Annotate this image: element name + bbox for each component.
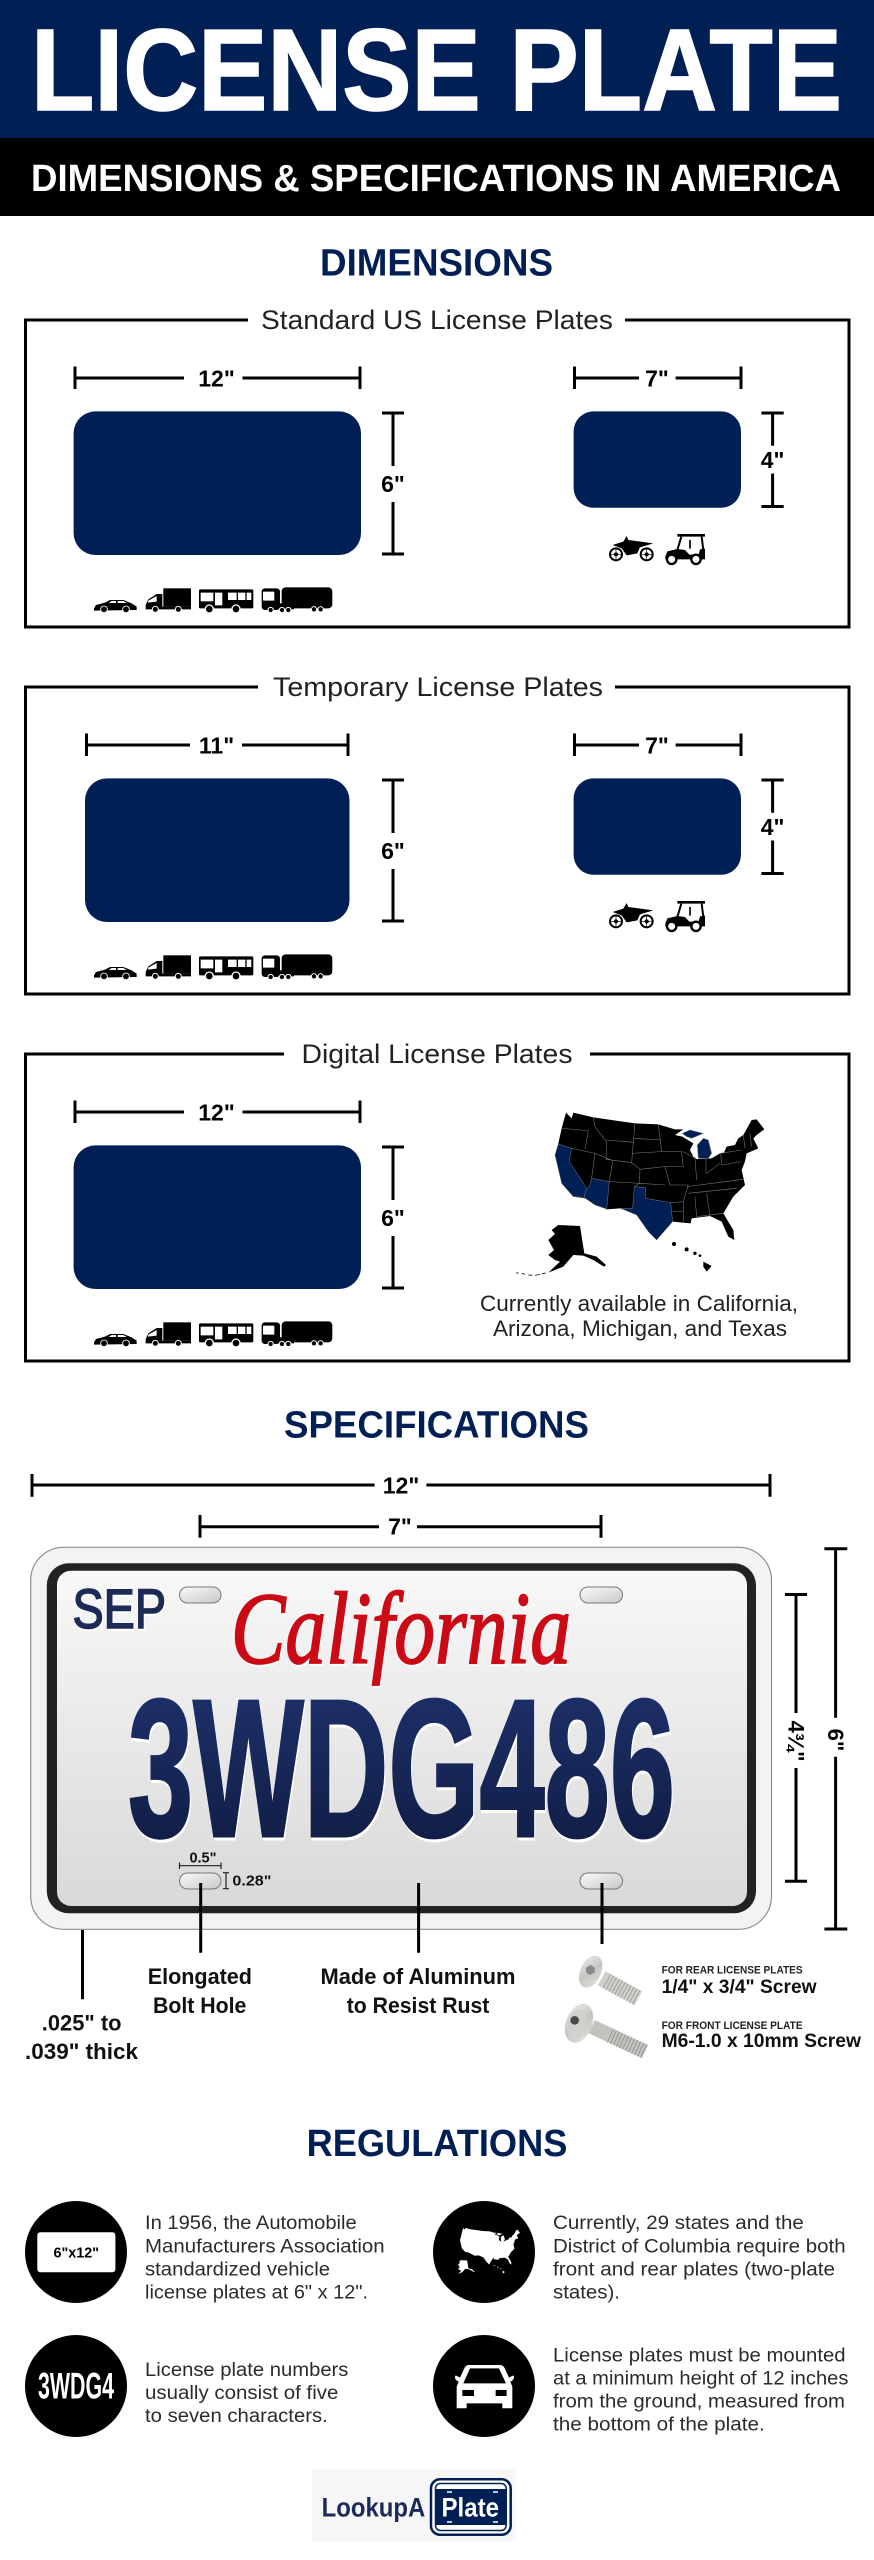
heading: specifications: SPECIFICATIONS [284, 1404, 589, 1446]
plate month SEP: SEP [72, 1577, 166, 1640]
text [553, 2346, 848, 2436]
label: elongated bolt hole: Elongated [148, 1964, 252, 1989]
plate 12x6 [74, 1100, 405, 1289]
text: usually consist of five [145, 2383, 338, 2404]
plate 11x6 [85, 732, 405, 922]
panel: standard US license plates [26, 305, 849, 627]
text: the bottom of the plate. [553, 2415, 765, 2436]
text: Currently, 29 states and the [553, 2213, 804, 2234]
text: front and rear plates (two-plate [553, 2259, 835, 2280]
icons: motorcycle and golf cart [610, 534, 705, 564]
icons: car truck bus semi [94, 954, 332, 980]
label: elongated bolt hole: Bolt Hole [153, 1993, 246, 2018]
illustration: California license plate [31, 1547, 771, 1929]
text [553, 2213, 846, 2303]
dimension: overall width 12 inches [32, 1472, 770, 1498]
text: from the ground, measured from [553, 2392, 845, 2413]
text: at a minimum height of 12 inches [553, 2369, 848, 2390]
subtitle bar [0, 138, 874, 216]
plate state name: California [231, 1572, 571, 1686]
plate 12x6 [74, 366, 405, 555]
regulation: mounting height [433, 2335, 848, 2437]
plate 12x6: 12" [198, 366, 235, 392]
text [145, 2360, 348, 2427]
label: thickness: .025" to [42, 2011, 121, 2036]
plate 12x6: 6" [381, 471, 405, 497]
regulation: 1956 standard [25, 2201, 385, 2303]
text: License plate numbers [145, 2360, 348, 2381]
plate 11x6: 6" [381, 838, 405, 864]
bolt hole height [223, 1873, 271, 1890]
text: rear plate screw [662, 1964, 817, 1998]
plate 7x4: 4" [761, 447, 784, 473]
icon: car front [433, 2335, 535, 2437]
plate 12x6: 6" [381, 1205, 405, 1231]
heading: regulations: REGULATIONS [307, 2123, 567, 2165]
icon: front plate screw [560, 2000, 645, 2052]
icon: 6x12 plate [25, 2201, 127, 2303]
text: front plate screw [662, 2020, 861, 2052]
bolt hole width: 0.5" [189, 1851, 217, 1867]
map: US with digital plate states highlighted [516, 1113, 764, 1275]
regulation: two-plate states [433, 2201, 846, 2303]
plate 7x4 [574, 366, 784, 508]
map caption: Arizona, Michigan, and Texas [493, 1316, 787, 1341]
regulation: plate characters [25, 2335, 348, 2437]
text: In 1956, the Automobile [145, 2213, 357, 2234]
plate 12x6: 12" [198, 1100, 235, 1126]
map caption [480, 1291, 798, 1341]
label: thickness [25, 2011, 139, 2064]
logo: LookupAPlate: Plate [442, 2493, 499, 2523]
icon: 3WDG4: 3WDG4 [38, 2365, 114, 2406]
label: aluminum: to Resist Rust [347, 1993, 490, 2018]
plate 7x4: 7" [645, 366, 669, 392]
text: rear plate screw: 1/4" x 3/4" Screw [662, 1977, 817, 1998]
map caption: Currently available in California, [480, 1291, 798, 1316]
icons: car truck bus semi [94, 587, 332, 613]
dimension: overall width 12 inches: 12" [383, 1472, 419, 1498]
subtitle bar: DIMENSIONS & SPECIFICATIONS IN AMERICA [31, 158, 841, 200]
text: front plate screw: FOR FRONT LICENSE PLATE [662, 2020, 803, 2032]
label: elongated bolt hole [148, 1964, 252, 2018]
panel title: Digital License Plates [302, 1039, 572, 1069]
text: front plate screw: M6-1.0 x 10mm Screw [662, 2031, 861, 2052]
text: Manufacturers Association [145, 2236, 385, 2257]
dimension: bolt spacing 7 inches: 7" [388, 1514, 412, 1540]
icons: motorcycle and golf cart [610, 901, 705, 931]
plate 7x4: 4" [761, 814, 784, 840]
label: thickness: .039" thick [25, 2039, 139, 2064]
text: to seven characters. [145, 2406, 328, 2427]
dimension: overall height 6 inches [823, 1549, 848, 1929]
plate 7x4: 7" [645, 732, 669, 758]
header banner [0, 0, 874, 138]
dimension: bolt spacing 4 3/4 inches: 4¾" [784, 1720, 808, 1762]
leader lines [82, 1883, 602, 1999]
text: District of Columbia require both [553, 2236, 846, 2257]
panel title: Standard US License Plates [261, 305, 613, 335]
text: License plates must be mounted [553, 2346, 846, 2367]
bolt hole height: 0.28" [232, 1874, 271, 1890]
label: aluminum: Made of Aluminum [320, 1964, 516, 1989]
icons: car truck bus semi [94, 1321, 332, 1347]
text [145, 2213, 385, 2303]
dimension: bolt spacing 4 3/4 inches [784, 1594, 808, 1881]
plate 7x4 [574, 732, 784, 875]
panel title: Temporary License Plates [273, 672, 603, 702]
bolt hole width [180, 1851, 221, 1869]
logo: LookupAPlate [312, 2469, 516, 2541]
icon: US map [433, 2201, 535, 2303]
panel: temporary license plates [26, 672, 849, 994]
text: license plates at 6" x 12". [145, 2282, 368, 2303]
icon: rear plate screw [575, 1952, 638, 1998]
icon: 3WDG4 [25, 2335, 127, 2437]
panel: digital license plates [26, 1039, 849, 1361]
dimension: bolt spacing 7 inches [200, 1514, 601, 1540]
bolt holes [180, 1587, 622, 1889]
text: standardized vehicle [145, 2259, 330, 2280]
label: aluminum [320, 1964, 516, 2018]
dimension: overall height 6 inches: 6" [823, 1729, 848, 1751]
heading: dimensions: DIMENSIONS [320, 242, 553, 284]
plate 11x6: 11" [199, 732, 234, 758]
logo: LookupAPlate: LookupA [322, 2493, 425, 2523]
text: rear plate screw: FOR REAR LICENSE PLATES [662, 1964, 803, 1976]
icon: 6x12 plate: 6"x12" [54, 2244, 99, 2262]
text: states). [553, 2282, 620, 2303]
